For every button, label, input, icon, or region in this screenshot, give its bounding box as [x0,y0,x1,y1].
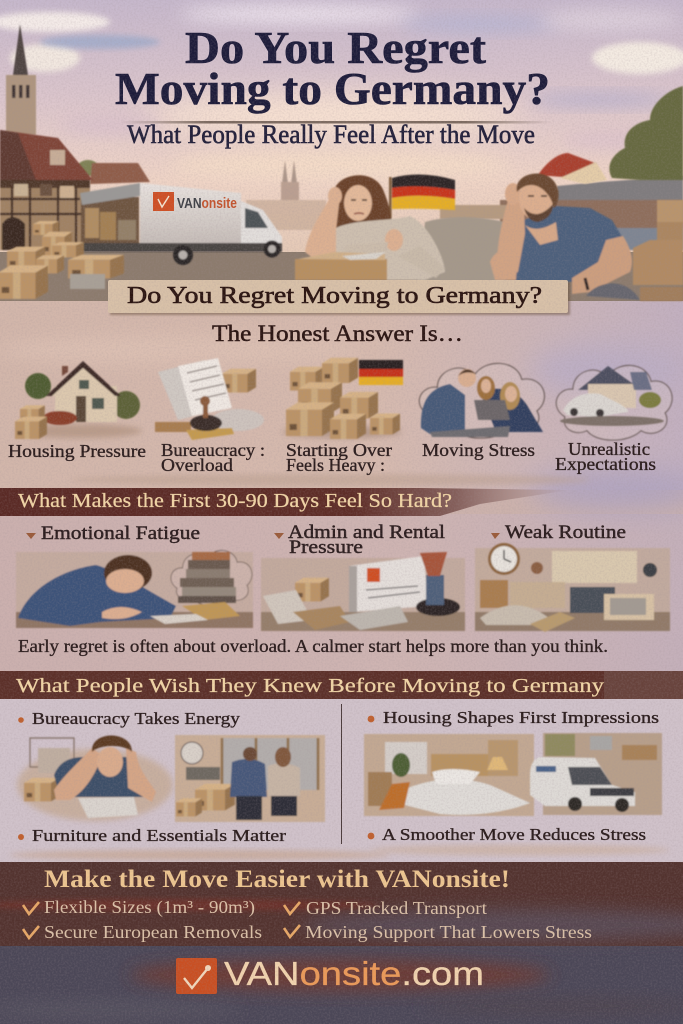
section band: first 30-90 days [0,488,570,516]
illustration: paperwork [261,552,465,631]
panel: weak routine [475,523,670,632]
heading [274,523,445,558]
title: Do You Regret [185,22,487,73]
brand url: VAN onsite .com [224,955,484,992]
german flag [392,174,455,210]
heading: Emotional Fatigue [41,524,200,544]
benefit: moving support: Moving Support That Lowers Stress [305,922,592,942]
illustration: unfinished room [475,543,670,632]
panel: wishes [17,704,662,845]
distant cathedral [246,160,326,230]
title: Moving to Germany? [115,63,550,114]
subtitle: What People Really Feel After the Move [127,120,535,149]
panel: emotional fatigue [16,524,253,628]
sofa [418,217,510,282]
van logo [153,192,174,211]
bullet: housing shapes first impressions: Housing Shapes First Impressions [383,708,659,727]
stacked boxes left [0,221,124,299]
icon: house [15,361,142,439]
benefit: flexible sizes: Flexible Sizes (1m³ - 90m³) [44,897,255,917]
heading: Pressure [289,538,363,558]
footer logo [176,955,484,994]
reason labels [8,439,656,475]
church tower [6,24,36,135]
section band: what people wish [0,671,683,699]
icon: paperwork and stamp [155,358,264,440]
section band: first 30-90 days: What Makes the First 30-90 Days Feel So Hard? [18,490,452,512]
van brand text: VANonsite [177,195,237,212]
reason labels: Overload [161,455,233,475]
moving van [80,183,282,265]
reason labels: Housing Pressure [8,441,146,461]
panel: admin and rental pressure [261,523,465,631]
reason labels: Moving Stress [422,440,535,460]
section band: what people wish: What People Wish They Knew Before Moving to Germany [16,675,605,697]
bullet: smoother move: A Smoother Move Reduces Stress [382,825,646,844]
cta heading: Make the Move Easier with VANonsite! [44,866,510,893]
illustration: stressed man [17,736,173,821]
man on sofa [490,153,640,300]
benefit: gps: GPS Tracked Transport [306,898,487,918]
illustration: tired woman [16,551,253,628]
panel: five reasons [8,358,672,475]
stacked boxes right [633,200,683,301]
reason labels: Unrealistic [568,439,650,459]
icon: couple with laptop [419,364,544,438]
reason labels: Expectations [555,454,656,474]
half-timbered house [0,130,93,250]
illustration: bedroom [364,734,534,816]
call to action panel [23,866,592,942]
illustration: couple at window [175,735,325,822]
benefit: secure removals: Secure European Removals [44,922,262,942]
icon: logo [176,958,217,994]
bullet: bureaucracy takes energy: Bureaucracy Takes Energy [32,709,241,728]
reason labels: Starting Over [286,440,392,460]
banner: Do You Regret Moving to Germany? [127,283,542,309]
icon: house and car dream [556,366,672,440]
title [115,22,550,114]
bullet: furniture and essentials: Furniture and Essentials Matter [32,826,286,845]
box in front of woman [295,252,387,280]
heading: Weak Routine [505,523,626,543]
reason labels: Bureaucracy : [161,440,265,460]
hero scene [0,24,683,301]
buildings right [440,176,683,250]
small flag [359,360,403,385]
woman with flag [295,174,455,280]
red flag behind man [538,153,595,178]
caption: Early regret is often about overload. A calmer start helps more than you think. [18,636,608,656]
second roof and bush [77,160,150,184]
heading: Admin and Rental [288,523,445,543]
heading: the honest answer: The Honest Answer Is… [212,321,463,346]
icon: pile of boxes with flag [282,358,403,439]
tree [609,86,683,180]
illustration: delivery van [530,733,662,815]
banner [108,280,570,315]
reason labels: Feels Heavy : [286,455,385,475]
